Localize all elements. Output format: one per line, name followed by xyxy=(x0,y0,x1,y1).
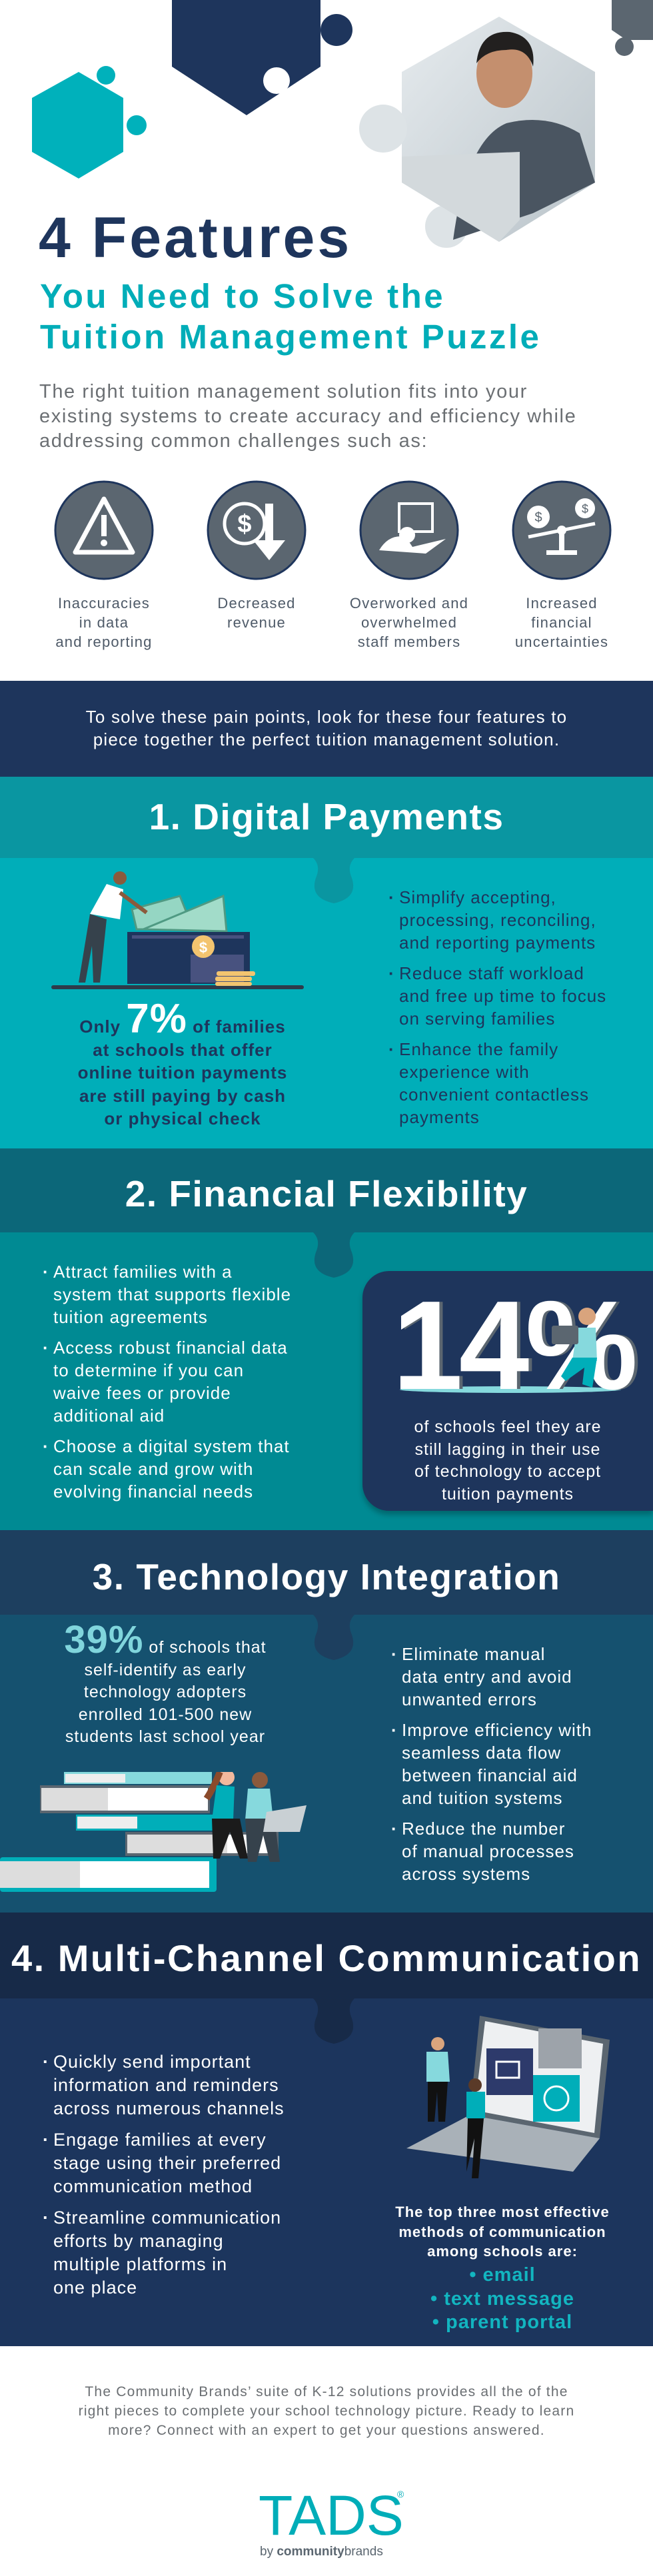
illustration: person with wallet: $ xyxy=(199,939,207,956)
intro band xyxy=(0,681,653,777)
intro band: piece together the perfect tuition management solution. xyxy=(93,729,560,749)
bullets: tuition agreements xyxy=(53,1307,208,1327)
footer text: The Community Brands’ suite of K-12 solutions provides all the of the xyxy=(85,2384,568,2399)
bullets: system that supports flexible xyxy=(53,1284,291,1304)
bullets: Quickly send important xyxy=(53,2052,251,2072)
bullets: seamless data flow xyxy=(402,1743,561,1763)
list: email, text, portal: • text message xyxy=(430,2288,574,2309)
logo: TADS by communitybrands: ® xyxy=(397,2489,404,2499)
stat: top three methods: The top three most effective xyxy=(395,2204,610,2220)
bullets: Engage families at every xyxy=(53,2130,267,2150)
stat: top three methods xyxy=(395,2204,610,2260)
section 3 header: 3. Technology Integration xyxy=(93,1556,560,1597)
heading: 4 Features: 4 Features xyxy=(39,206,352,270)
section 1 header xyxy=(0,777,653,858)
illustration: books and people xyxy=(0,1772,307,1892)
stat: top three methods: methods of communication xyxy=(398,2224,606,2240)
photo hexagon: man with laptop xyxy=(359,17,595,248)
stat: 39%: enrolled 101-500 new xyxy=(79,1705,252,1724)
bullets: multiple platforms in xyxy=(53,2254,227,2274)
decorative puzzle pieces and photo xyxy=(32,0,653,248)
label: uncertainties xyxy=(515,595,608,650)
stat: 7%: online tuition payments xyxy=(78,1063,287,1082)
label: decreased revenue: Decreased xyxy=(217,595,296,612)
stat box: 14% xyxy=(362,1271,653,1511)
icon: overworked staff xyxy=(360,481,458,580)
navy puzzle piece xyxy=(172,0,352,115)
bullets: payments xyxy=(399,1107,480,1127)
stat: 7%: Only 7% of families xyxy=(79,996,286,1042)
section 2 body xyxy=(0,1232,653,1530)
label: overworked xyxy=(350,595,468,650)
bullets: to determine if you can xyxy=(53,1360,244,1380)
icon: decreased revenue: $ xyxy=(237,510,252,538)
bullets: of manual processes xyxy=(402,1841,574,1861)
intro band: To solve these pain points, look for these four features to xyxy=(86,707,567,727)
bullets xyxy=(44,1262,291,1502)
bullets: information and reminders xyxy=(53,2075,279,2095)
section 4 header: 4. Multi-Channel Communication xyxy=(11,1937,642,1979)
bullets: Simplify accepting, xyxy=(399,887,556,907)
stat: 39%: 39% of schools that xyxy=(64,1618,267,1661)
label: inaccuracies: in data xyxy=(79,614,129,631)
bullets: Eliminate manual xyxy=(402,1644,545,1664)
stat: 7% xyxy=(78,996,287,1128)
section 3 header xyxy=(0,1530,653,1615)
label: inaccuracies: and reporting xyxy=(55,634,153,650)
bullets: on serving families xyxy=(399,1009,555,1029)
bullets xyxy=(44,2052,285,2298)
icon: financial uncertainty: $ xyxy=(582,502,588,516)
challenge icons row xyxy=(55,481,612,650)
stat: 7%: are still paying by cash xyxy=(79,1086,286,1106)
bullets: and tuition systems xyxy=(402,1788,563,1808)
teal hex puzzle piece xyxy=(32,66,147,179)
intro paragraph: existing systems to create accuracy and efficiency while xyxy=(39,406,576,427)
list: email, text, portal: • parent portal xyxy=(432,2312,572,2333)
list: email, text, portal: • email xyxy=(469,2264,536,2286)
icon: financial uncertainty xyxy=(512,481,612,580)
stat: 7%: or physical check xyxy=(104,1108,261,1128)
gray puzzle piece top right xyxy=(612,0,653,56)
intro paragraph: The right tuition management solution fits into your xyxy=(39,381,528,402)
bullets: Attract families with a xyxy=(53,1262,233,1282)
stat: 39% xyxy=(64,1618,267,1746)
label: inaccuracies xyxy=(55,595,153,650)
label: uncertainties: uncertainties xyxy=(515,634,608,650)
bullets: stage using their preferred xyxy=(53,2153,281,2173)
logo: TADS by communitybrands: by communitybrands xyxy=(260,2545,383,2559)
bullets: data entry and avoid xyxy=(402,1667,572,1687)
bullets: one place xyxy=(53,2278,137,2298)
logo: TADS by communitybrands: TADS xyxy=(259,2484,404,2547)
stat: 39%: self-identify as early xyxy=(85,1660,246,1679)
stat: 7%: at schools that offer xyxy=(93,1039,273,1059)
subheading: Tuition Management Puzzle xyxy=(40,318,541,356)
stat: 39%: technology adopters xyxy=(84,1683,247,1701)
label: inaccuracies: Inaccuracies xyxy=(58,595,150,612)
bullets xyxy=(392,1644,592,1884)
label: overworked: staff members xyxy=(358,634,460,650)
bullets: and reporting payments xyxy=(399,933,596,953)
label: overworked: overwhelmed xyxy=(361,614,457,631)
bullets: across numerous channels xyxy=(53,2098,285,2118)
subheading: You Need to Solve the xyxy=(40,277,445,315)
label: uncertainties: Increased xyxy=(526,595,598,612)
bullets: processing, reconciling, xyxy=(399,910,596,930)
bullets: Choose a digital system that xyxy=(53,1436,290,1456)
intro paragraph: addressing common challenges such as: xyxy=(39,430,428,452)
icon: decreased revenue xyxy=(207,481,307,580)
stat box: 14%: still lagging in their use xyxy=(415,1440,600,1459)
illustration: laptop with puzzle icons xyxy=(406,2016,610,2178)
bullets: Improve efficiency with xyxy=(402,1720,592,1740)
illustration: person with wallet xyxy=(51,871,304,989)
stat: 39%: students last school year xyxy=(65,1727,265,1746)
section 1 header: 1. Digital Payments xyxy=(149,796,504,837)
bullets: waive fees or provide xyxy=(53,1383,231,1403)
section 2 header: 2. Financial Flexibility xyxy=(125,1173,528,1214)
label: decreased revenue: revenue xyxy=(227,614,286,631)
bullets: convenient contactless xyxy=(399,1084,589,1104)
section 3 body xyxy=(0,1615,653,1913)
section 4 header xyxy=(0,1913,653,1998)
footer text: more? Connect with an expert to get your questions answered. xyxy=(108,2423,545,2438)
bullets: can scale and grow with xyxy=(53,1459,253,1479)
bullets: and free up time to focus xyxy=(399,986,606,1006)
label: uncertainties: financial xyxy=(531,614,592,631)
bullets: communication method xyxy=(53,2176,253,2196)
bullets: evolving financial needs xyxy=(53,1482,253,1502)
section 1 body xyxy=(0,858,653,1148)
bullets: Access robust financial data xyxy=(53,1338,288,1358)
bullets: across systems xyxy=(402,1864,530,1884)
bullets: between financial aid xyxy=(402,1765,578,1785)
icon: warning xyxy=(55,481,153,580)
bullets: Reduce the number xyxy=(402,1819,565,1839)
subheading xyxy=(40,277,541,356)
icon: financial uncertainty: $ xyxy=(534,510,542,525)
section 4 body xyxy=(0,1998,653,2346)
bullets: Enhance the family xyxy=(399,1039,558,1059)
bullets: efforts by managing xyxy=(53,2231,224,2251)
stat box: 14%: of schools feel they are xyxy=(414,1418,602,1436)
footer text: right pieces to complete your school technology picture. Ready to learn xyxy=(79,2403,574,2419)
label: decreased revenue xyxy=(217,595,296,631)
stat: top three methods: among schools are: xyxy=(427,2243,578,2260)
footer text xyxy=(79,2384,574,2438)
intro paragraph xyxy=(39,381,576,452)
section 2 header xyxy=(0,1148,653,1232)
bullets xyxy=(389,887,606,1127)
list: email, text, portal xyxy=(430,2264,574,2333)
bullets: Reduce staff workload xyxy=(399,963,584,983)
bullets: unwanted errors xyxy=(402,1689,537,1709)
bullets: experience with xyxy=(399,1062,530,1082)
stat box: 14%: tuition payments xyxy=(442,1484,574,1503)
stat box: 14%: of technology to accept xyxy=(414,1462,601,1481)
bullets: Streamline communication xyxy=(53,2208,281,2228)
bullets: additional aid xyxy=(53,1406,165,1426)
label: overworked: Overworked and xyxy=(350,595,468,612)
